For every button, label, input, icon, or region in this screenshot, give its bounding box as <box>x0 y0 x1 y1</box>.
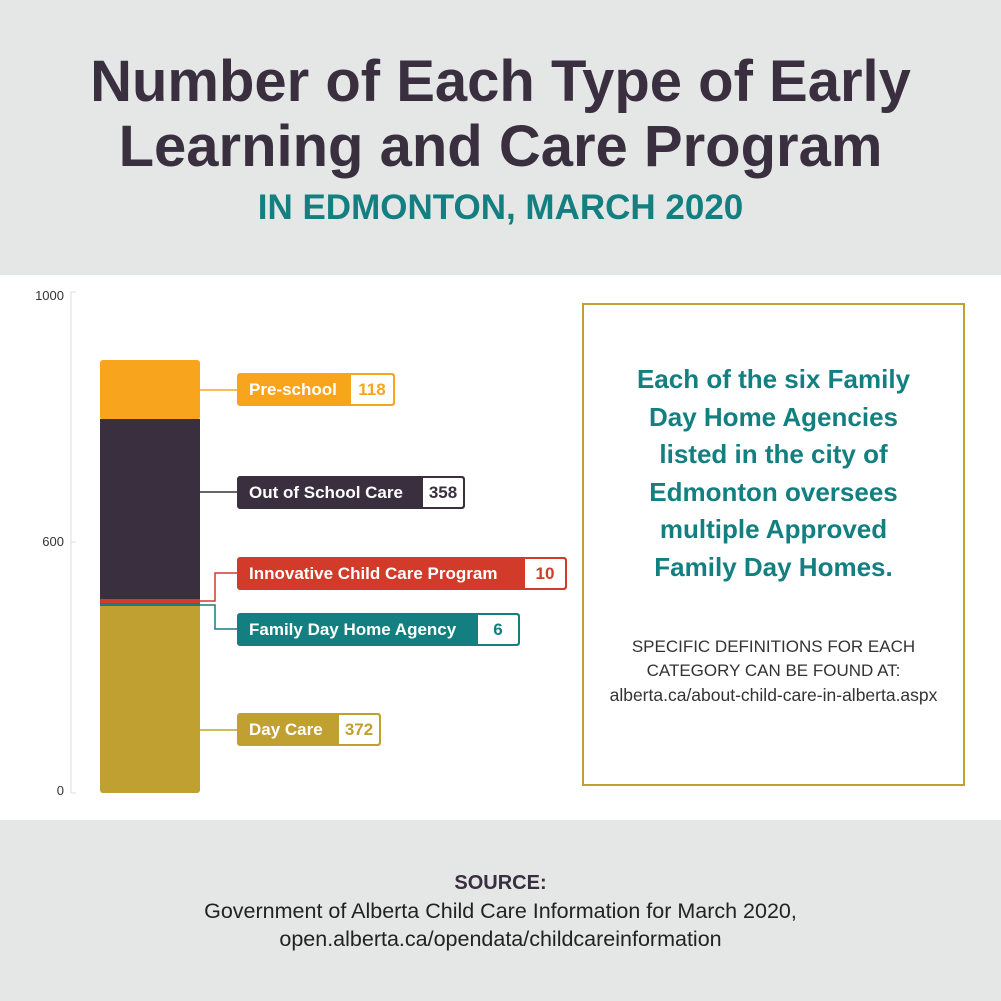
label: out of school care: Out of School Care <box>249 482 403 502</box>
stacked bar <box>100 360 200 793</box>
callout text: listed in the city of <box>659 439 888 469</box>
callout text <box>637 364 910 582</box>
definitions note: alberta.ca/about-child-care-in-alberta.aspx <box>610 685 937 705</box>
axis labels: 0 <box>57 783 64 798</box>
footer source: Government of Alberta Child Care Information for March 2020, <box>204 899 797 923</box>
label: out of school care <box>237 476 465 509</box>
callout text: Family Day Homes. <box>654 552 893 582</box>
label: day care: 372 <box>345 720 373 738</box>
label: day care: Day Care <box>249 720 323 738</box>
footer source: SOURCE: <box>454 872 547 894</box>
callout box <box>582 303 965 786</box>
subtitle: IN EDMONTON, MARCH 2020 <box>258 188 743 227</box>
definitions note: SPECIFIC DEFINITIONS FOR EACH <box>632 637 915 656</box>
axis labels: 600 <box>42 534 64 549</box>
definitions note <box>610 637 938 705</box>
axis labels: 1000 <box>35 288 64 303</box>
label: pre-school: Pre-school <box>249 380 337 398</box>
footer source <box>0 820 1001 1001</box>
label: innovative: Innovative Child Care Program <box>249 564 497 582</box>
label: innovative <box>237 557 567 590</box>
label: innovative: 10 <box>536 564 554 582</box>
axis labels <box>35 288 64 798</box>
label: day care <box>237 713 381 746</box>
label: family day home agency: 6 <box>493 620 503 638</box>
callout text: Day Home Agencies <box>649 402 898 432</box>
label: family day home agency: Family Day Home Agency <box>249 620 456 638</box>
header panel <box>0 0 1001 275</box>
title: Learning and Care Program <box>119 114 882 179</box>
callout text: Each of the six Family <box>637 364 910 394</box>
title <box>90 49 911 179</box>
label: out of school care: 358 <box>429 482 457 502</box>
connectors <box>200 390 237 730</box>
label: pre-school: 118 <box>358 380 386 398</box>
callout text: multiple Approved <box>660 514 887 544</box>
label: family day home agency <box>237 613 520 646</box>
label: pre-school <box>237 373 395 406</box>
callout text: Edmonton oversees <box>649 476 898 506</box>
definitions note: CATEGORY CAN BE FOUND AT: <box>647 661 900 680</box>
title: Number of Each Type of Early <box>90 49 911 114</box>
chart <box>35 288 567 798</box>
footer source: open.alberta.ca/opendata/childcareinformation <box>279 927 722 951</box>
